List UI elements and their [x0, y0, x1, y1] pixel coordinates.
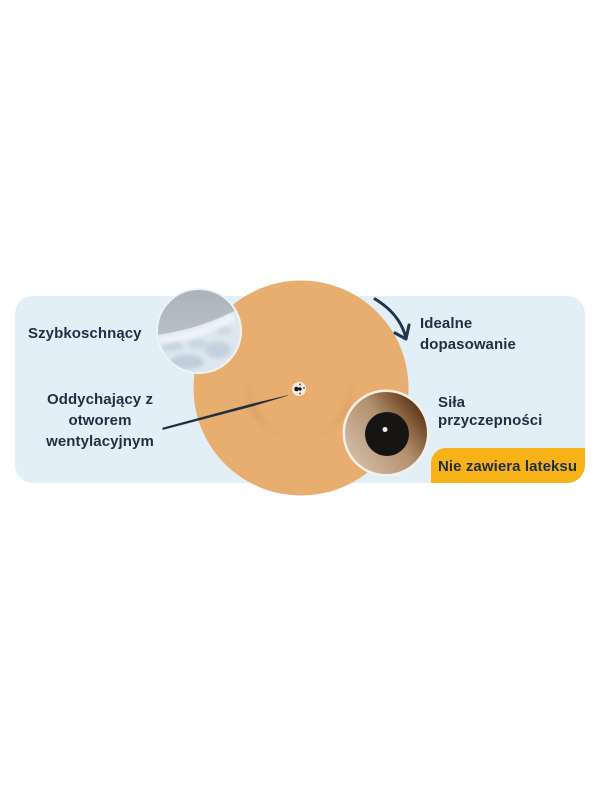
label: breathable with vent hole: Oddychający z	[47, 391, 153, 408]
label: quick-drying: Szybkoschnący	[28, 325, 142, 342]
label: ideal fit: dopasowanie	[420, 336, 516, 353]
label: ideal fit	[420, 315, 516, 353]
label: adhesive strength	[438, 394, 542, 429]
label: adhesive strength: Siła	[438, 394, 465, 411]
label: ideal fit: Idealne	[420, 315, 472, 332]
plaster disc	[194, 280, 408, 496]
illustration: plaster with detail circles	[156, 280, 430, 496]
pointer line to vent hole	[162, 396, 288, 430]
label: breathable with vent hole: otworem	[68, 412, 132, 429]
infographic	[15, 280, 585, 496]
label: breathable with vent hole	[46, 391, 154, 450]
badge: latex free	[431, 448, 585, 483]
detail: quick-drying foam	[150, 285, 242, 374]
detail: adhesive strength	[342, 390, 430, 476]
arrow: ideal fit	[375, 299, 409, 339]
panel: light blue background	[15, 296, 585, 483]
label: latex free: Nie zawiera lateksu	[438, 458, 577, 475]
label: adhesive strength: przyczepności	[438, 412, 542, 429]
icon: vent hole	[292, 382, 306, 396]
label: breathable with vent hole: wentylacyjnym	[46, 433, 154, 450]
